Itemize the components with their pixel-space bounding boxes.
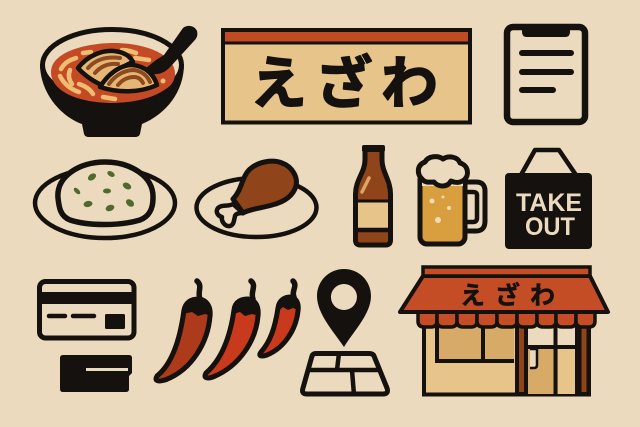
walls	[424, 325, 589, 394]
icon: beer bottle	[356, 145, 390, 245]
chilli 1	[156, 281, 212, 381]
icon: chicken drumstick plate	[196, 161, 316, 237]
chashu slices	[78, 51, 157, 91]
sign: shop name	[223, 30, 470, 122]
icon: map	[302, 353, 388, 395]
posts	[517, 326, 526, 394]
roof	[400, 276, 608, 312]
door	[527, 326, 579, 394]
icon: map pin	[317, 269, 371, 347]
window	[437, 326, 514, 361]
icon: beer mug	[418, 157, 485, 244]
icon: ramen bowl	[40, 26, 197, 137]
spoon	[146, 26, 197, 74]
icon: credit card	[39, 282, 134, 338]
shop name: えざわ	[460, 276, 555, 312]
icon: shopfront	[400, 267, 608, 394]
icon: black card	[60, 355, 132, 392]
icon: clipboard menu	[507, 25, 585, 122]
chilli 3	[260, 281, 300, 356]
sign text: えざわ	[250, 38, 438, 120]
icon: chillies	[156, 281, 300, 381]
icon: takeout bag	[505, 150, 592, 249]
bag text: TAKE	[516, 189, 582, 217]
roof cap	[423, 267, 590, 276]
icon: takeout bag: OUT	[525, 213, 575, 241]
chilli 2	[205, 281, 260, 378]
awning scallops	[418, 312, 595, 327]
icon: rice plate	[35, 162, 175, 238]
